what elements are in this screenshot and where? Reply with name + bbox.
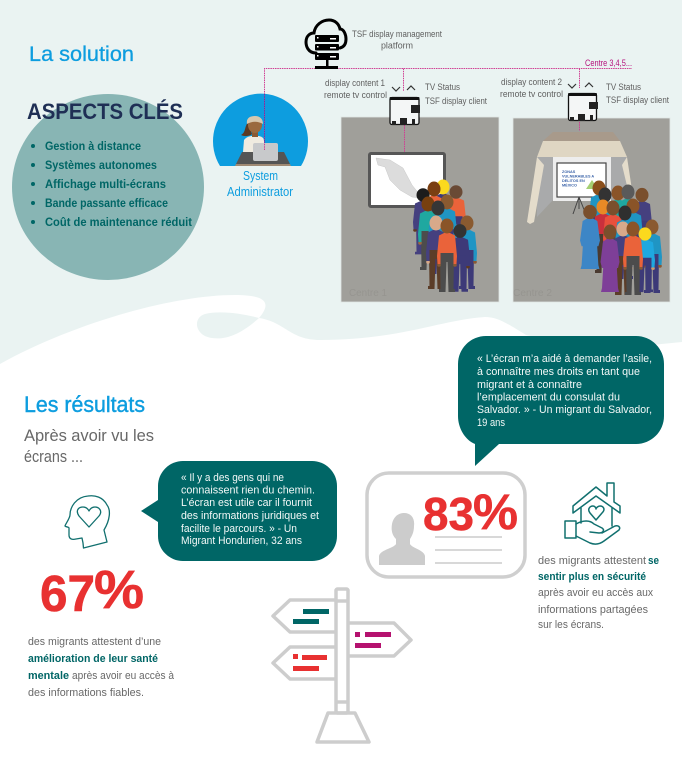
stat: 83%: 83 <box>423 488 474 540</box>
panel: centre 2 <box>513 118 670 302</box>
text: mental health result: des informations fiables. <box>28 687 144 699</box>
tent with screen: ZONAS <box>562 170 576 174</box>
text: mental health result <box>28 636 175 699</box>
panel: aspects clés <box>12 94 204 280</box>
ID card with 83% <box>367 473 525 577</box>
card lines <box>435 537 502 563</box>
subheading: après avoir vu les écrans: Après avoir vu les <box>24 427 154 445</box>
bullet list <box>31 139 192 229</box>
speech bubble: Salvadoran migrant: « L’écran m’a aidé à demander l’asile, <box>477 353 652 365</box>
screen with map of Mexico <box>370 154 444 206</box>
speech bubble: Honduran migrant: des informations juridiques et <box>181 510 319 522</box>
speech bubble: Honduran migrant: connaissent rien du chemin. <box>181 484 315 496</box>
bullet list: Coût de maintenance réduit <box>45 215 192 229</box>
text: safety result: des migrants attestent <box>538 555 646 567</box>
icon: signpost <box>273 589 411 742</box>
label: platform: TSF display management <box>352 29 442 39</box>
device client 1 <box>324 78 487 125</box>
label: system administrator: System <box>243 168 278 183</box>
tent with screen <box>527 132 632 224</box>
icon: house in hand <box>565 483 620 544</box>
text: safety result: sur les écrans. <box>538 619 604 631</box>
device labels right <box>425 82 487 106</box>
icon: client box <box>568 93 598 121</box>
subheading: après avoir vu les écrans: écrans ... <box>24 448 83 466</box>
device labels right: TV Status <box>606 82 641 92</box>
title: La solution: La solution <box>29 43 134 66</box>
panel: centre 1 <box>341 117 499 302</box>
chevrons <box>568 83 593 88</box>
heading: aspects clés: ASPECTS CLÉS <box>27 99 183 124</box>
bullet list: Bande passante efficace <box>45 196 168 210</box>
panel: system administrator <box>213 94 308 199</box>
faint label: centre 1: Centre 1 <box>349 288 387 299</box>
icon: person silhouette <box>379 513 425 565</box>
speech bubble: Honduran migrant <box>141 461 337 561</box>
speech bubble: Salvadoran migrant: migrant et à connaître <box>477 379 582 391</box>
device labels right: TSF display client <box>606 95 669 105</box>
bullet list: Affichage multi-écrans <box>45 177 166 191</box>
label: system administrator <box>227 168 294 199</box>
text: mental health result: mentale <box>28 670 69 682</box>
speech bubble: Salvadoran migrant: 19 ans <box>477 417 505 429</box>
speech bubble: Salvadoran migrant: l’emplacement du consulat du <box>477 392 620 404</box>
text: safety result: se <box>648 555 659 567</box>
crowd of people <box>580 180 662 295</box>
bullet list: Gestion à distance <box>45 139 141 153</box>
text: mental health result: après avoir eu accès à <box>72 670 175 682</box>
icon: cloud server <box>306 20 346 69</box>
device labels left: display content 2 <box>501 77 562 87</box>
device labels right <box>606 82 669 105</box>
network connection lines <box>264 68 632 152</box>
device labels right: TV Status <box>425 82 460 92</box>
device labels left: display content 1 <box>325 78 385 88</box>
crowd of people <box>413 180 477 292</box>
bullet list: Systèmes autonomes <box>45 158 157 172</box>
card outline <box>367 473 525 577</box>
stat: 67% <box>40 560 144 622</box>
tent with screen: MÉXICO <box>562 182 577 188</box>
speech bubble: Honduran migrant: Migrant Hondurien, 32 ans <box>181 535 302 547</box>
chevrons <box>392 86 415 91</box>
device labels right: TSF display client <box>425 96 487 106</box>
stat: 67%: 67 <box>40 565 95 622</box>
tent with screen: DELITOS EN <box>562 179 585 183</box>
speech bubble: Salvadoran migrant: à connaître mes droits en tant que <box>477 366 640 378</box>
text: safety result: sentir plus en sécurité <box>538 571 646 583</box>
stat: 67%: % <box>94 560 144 620</box>
speech bubble: Honduran migrant: L’écran est utile car il fournit <box>181 497 312 509</box>
icon: administrator at desk <box>213 94 308 166</box>
subheading: après avoir vu les écrans <box>24 427 154 466</box>
tent with screen: VULNERABLES A <box>562 174 594 178</box>
stat: 83%: % <box>473 484 518 540</box>
heading: les résultats: Les résultats <box>24 392 145 417</box>
text: safety result: informations partagées <box>538 604 648 616</box>
label: centre 3,4,5: Centre 3,4,5... <box>585 58 632 69</box>
device labels left: remote tv control <box>324 90 387 100</box>
icon: head with heart <box>65 496 109 548</box>
device labels left: remote tv control <box>500 89 563 99</box>
label: system administrator: Administrator <box>227 184 294 199</box>
label: platform <box>352 29 442 50</box>
text: mental health result: des migrants attestent d’une <box>28 636 161 648</box>
text: safety result: après avoir eu accès aux <box>538 587 653 599</box>
text: safety result <box>538 555 659 631</box>
icon: client box <box>390 97 420 125</box>
speech bubble: Salvadoran migrant: Salvador. » - Un migrant du Salvador, <box>477 404 652 416</box>
speech bubble: Honduran migrant: « Il y a des gens qui ne <box>181 472 284 484</box>
speech bubble: Honduran migrant: facilite le parcours. » - Un <box>181 523 297 535</box>
speech bubble: Salvadoran migrant <box>458 336 664 466</box>
teal circle <box>12 94 204 280</box>
device labels left <box>500 77 563 99</box>
device labels left <box>324 78 387 100</box>
stat: 83% <box>423 484 518 540</box>
faint label: centre 2: Centre 2 <box>513 288 552 299</box>
text: mental health result: amélioration de leur santé <box>28 653 158 665</box>
label: platform: platform <box>381 40 413 50</box>
device client 2 <box>500 77 669 121</box>
